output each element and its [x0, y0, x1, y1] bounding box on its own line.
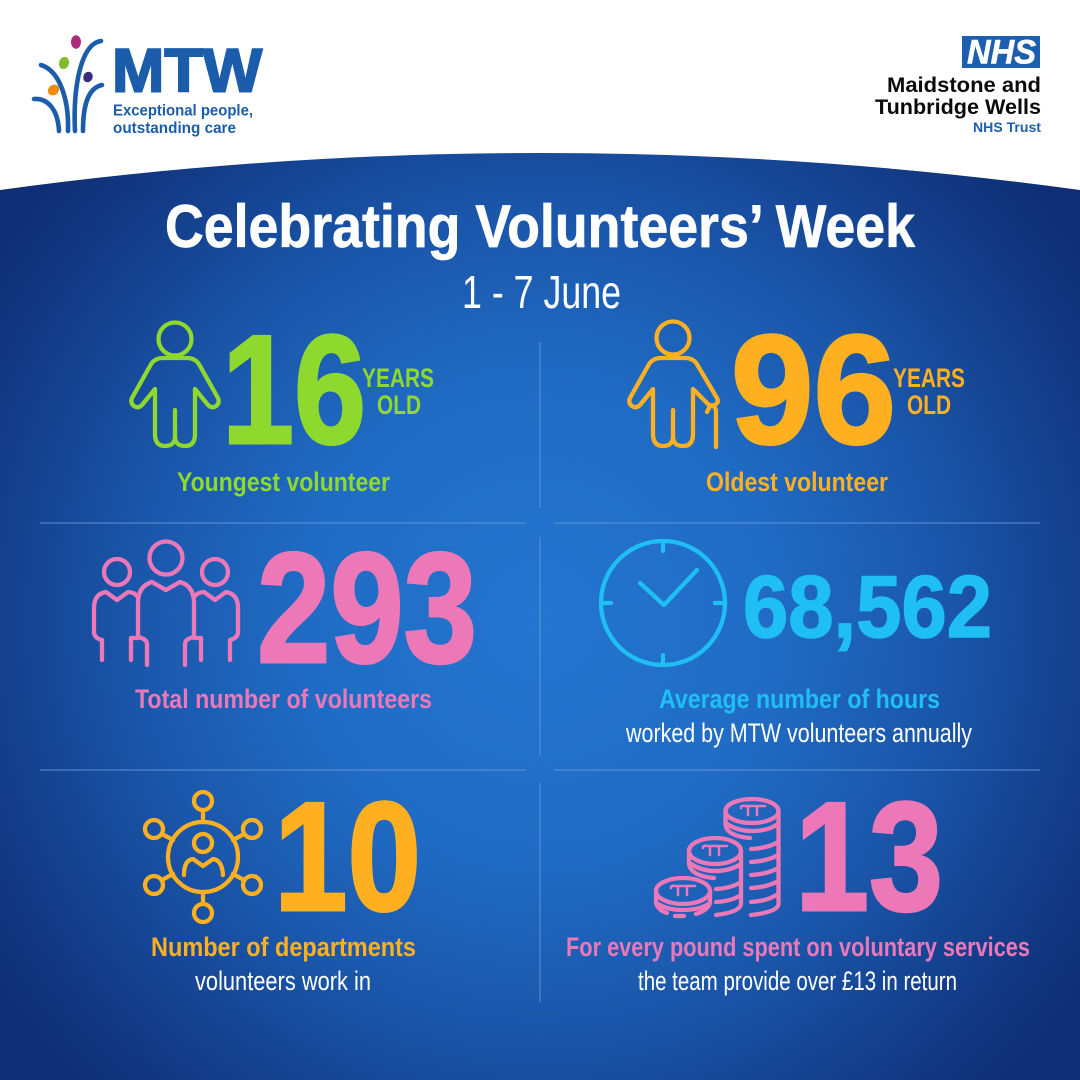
icon: pound coin stacks — [656, 799, 778, 916]
panel: average hours — [601, 541, 992, 748]
trust name: NHS Trust — [973, 119, 1041, 135]
icon: child — [131, 322, 219, 446]
icon: clock — [601, 541, 725, 665]
note: volunteers work in: volunteers work in — [195, 966, 371, 996]
label: average number of hours: Average number of hours — [659, 684, 940, 714]
MTW wordmark: MTW — [112, 36, 262, 104]
unit: years old: OLD — [907, 390, 951, 420]
stat: 10: 10 — [274, 770, 421, 943]
label: total number of volunteers: Total number of volunteers — [135, 684, 432, 714]
panel: youngest volunteer — [131, 303, 434, 497]
MTW logo — [34, 35, 262, 137]
grid dividers — [40, 342, 1040, 1002]
icon: older person with cane — [629, 322, 718, 447]
label: youngest volunteer: Youngest volunteer — [177, 467, 390, 497]
note: worked by volunteers: worked by MTW volunteers annually — [625, 718, 972, 748]
label: oldest volunteer: Oldest volunteer — [706, 467, 888, 497]
stat: 96: 96 — [731, 303, 896, 476]
label: number of departments: Number of departments — [151, 932, 416, 962]
icon: person network — [145, 792, 261, 922]
panel: return on spending — [566, 770, 1030, 996]
panel: total volunteers — [94, 521, 477, 714]
stat: 16: 16 — [222, 303, 366, 476]
logo strapline: Exceptional people, — [113, 102, 253, 120]
trust name — [875, 74, 1041, 135]
icon: plant with coloured dots — [34, 35, 102, 131]
panel: oldest volunteer — [629, 303, 965, 497]
NHS trust logo — [875, 34, 1041, 135]
stat: 293: 293 — [257, 521, 477, 696]
unit: years old — [362, 363, 434, 420]
unit: years old: YEARS — [893, 363, 965, 393]
unit: years old — [893, 363, 965, 420]
subtitle: dates: 1 - 7 June — [462, 266, 621, 318]
NHS lozenge: NHS — [967, 34, 1036, 72]
note: return: the team provide over £13 in return — [638, 966, 957, 996]
unit: years old: YEARS — [362, 363, 434, 393]
unit: years old: OLD — [377, 390, 421, 420]
stat: 13: 13 — [795, 770, 943, 943]
stat: 68,562: 68,562 — [743, 557, 992, 656]
trust name: Tunbridge Wells — [875, 96, 1041, 119]
logo strapline — [113, 102, 253, 137]
logo strapline: outstanding care — [113, 120, 236, 137]
title: Celebrating Volunteers’ Week — [165, 193, 916, 260]
trust name: Maidstone and — [887, 74, 1041, 97]
panel: departments — [145, 770, 421, 996]
icon: three people — [94, 542, 238, 665]
